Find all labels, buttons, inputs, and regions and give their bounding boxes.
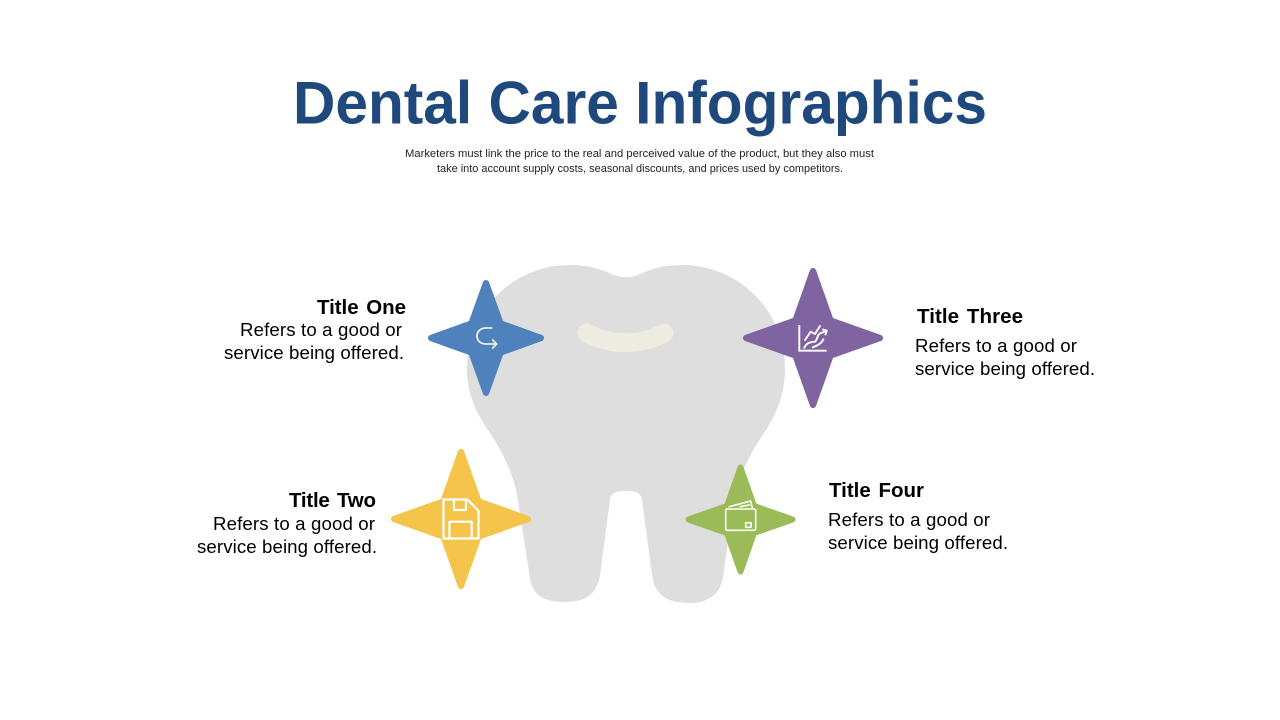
callout: Title Two: service being offered. [197,536,377,557]
callout: Title One: Refers to a good or [240,319,402,340]
icon: wallet [726,501,756,530]
callout: Title Four: Refers to a good or [828,509,990,530]
callout: Title Two: Refers to a good or [213,513,375,534]
title: Dental Care Infographics [293,68,987,136]
star: purple [746,271,880,405]
tooth body [467,265,785,603]
icon: redirect arrow [477,328,497,348]
callout: Title Four: service being offered. [828,532,1008,553]
callout: Title One: Title One [317,296,406,319]
callout: Title One [224,296,406,363]
subtitle text [405,148,874,175]
callout: Title Two [197,489,377,557]
icon: floppy disk [444,500,478,538]
star: yellow [394,452,528,586]
star: blue [431,283,541,393]
callout: Title Three [915,305,1095,379]
callout: Title Three: Title Three [917,305,1023,328]
star: green [688,468,792,572]
tooth illustration [467,265,785,603]
callout: Title Three: service being offered. [915,358,1095,379]
subtitle text: take into account supply costs, seasonal discounts, and prices used by competitors. [437,163,843,175]
callout: Title Three: Refers to a good or [915,335,1077,356]
callout: Title Four [828,479,1008,553]
subtitle text: Marketers must link the price to the real and perceived value of the product, but they also must [405,148,874,160]
tooth highlight [587,333,664,343]
callout: Title Two: Title Two [289,489,376,512]
icon: line chart [799,325,827,351]
callout: Title Four: Title Four [829,479,924,502]
callout: Title One: service being offered. [224,342,404,363]
